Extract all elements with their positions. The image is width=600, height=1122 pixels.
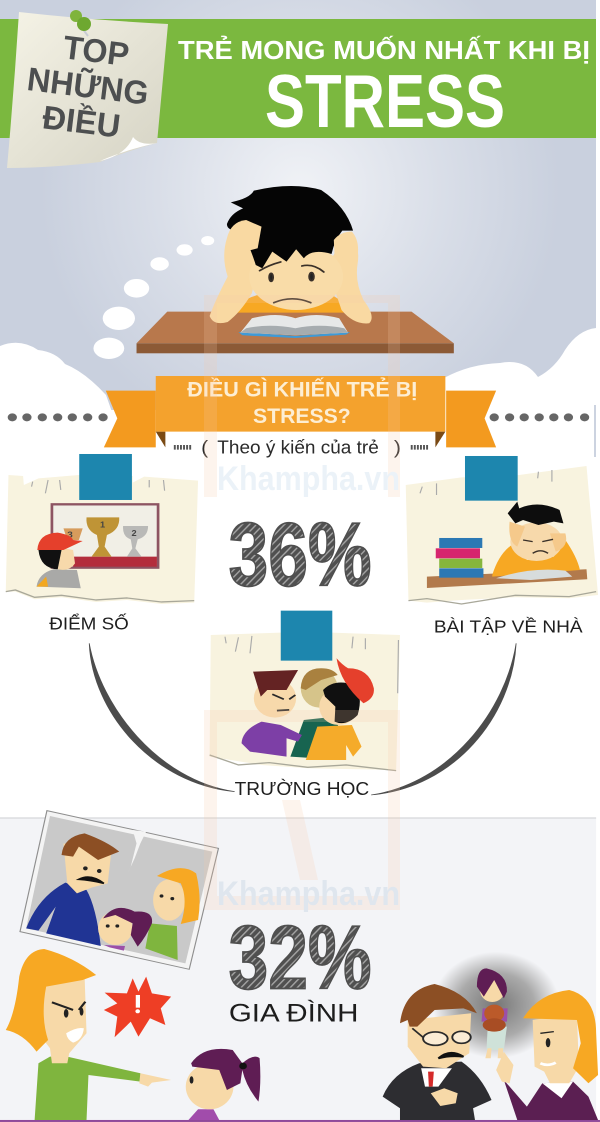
card: school	[210, 611, 400, 771]
tears	[225, 636, 398, 693]
hair	[227, 186, 353, 268]
trophy window	[52, 504, 158, 568]
hair	[6, 949, 96, 1052]
hair	[400, 984, 477, 1027]
label: grades: ĐIỂM SỐ	[49, 614, 129, 634]
angry mother	[6, 949, 171, 1120]
sticky note	[7, 10, 168, 168]
stressed boy at desk	[93, 186, 454, 359]
hands	[431, 1088, 458, 1106]
torn family photo	[20, 811, 218, 969]
card: homework	[406, 456, 598, 604]
card: grades	[6, 454, 198, 604]
tape	[465, 456, 518, 501]
note heading: ĐIỀU	[41, 98, 122, 145]
tape	[79, 454, 132, 500]
torn edge	[210, 755, 396, 771]
ribbon heading: ĐIỀU GÌ KHIẾN TRẺ BỊ	[187, 377, 417, 401]
pin	[70, 10, 91, 36]
mother	[145, 868, 200, 960]
head	[249, 243, 343, 310]
daughter	[98, 908, 152, 951]
watermark text bottom: Khampha.vn	[217, 875, 400, 913]
note curl	[100, 137, 157, 161]
caption: )	[394, 438, 401, 458]
watermark	[204, 295, 400, 913]
paper	[406, 466, 598, 603]
suit	[383, 1062, 492, 1120]
hair	[523, 990, 598, 1083]
head	[408, 1013, 471, 1068]
scolded girl	[186, 1049, 260, 1120]
body	[504, 1080, 598, 1120]
ribbon main	[156, 376, 445, 432]
right boy	[306, 658, 374, 760]
caption: (	[201, 438, 209, 458]
arms	[210, 230, 372, 323]
note heading: TOP	[61, 28, 131, 73]
ribbon heading	[187, 377, 417, 428]
header band	[0, 19, 596, 143]
label: family: GIA ĐÌNH	[229, 998, 358, 1027]
face	[260, 262, 324, 303]
raised hand	[496, 1052, 513, 1083]
section background	[0, 817, 600, 1122]
note heading: NHỮNG	[25, 60, 151, 112]
body and arm	[35, 1057, 140, 1120]
caption: Theo ý kiến của trẻ	[217, 438, 379, 458]
causes group	[6, 454, 598, 800]
white caption backing	[165, 431, 437, 461]
desk	[137, 312, 454, 353]
green banner	[0, 19, 596, 138]
sleeping boy	[492, 502, 580, 580]
title line: TRẺ MONG MUỐN NHẤT KHI BỊ	[178, 35, 590, 65]
torn edge	[6, 590, 194, 602]
shadow behind child	[433, 952, 560, 1058]
books	[436, 538, 483, 578]
moustache	[438, 1053, 463, 1058]
label: homework: BÀI TẬP VỀ NHÀ	[434, 617, 583, 637]
dotted dividers	[8, 413, 589, 421]
face	[546, 1038, 550, 1047]
torn edge	[408, 592, 596, 604]
right cloud	[440, 328, 596, 412]
shirt	[234, 293, 349, 313]
face	[52, 1002, 85, 1010]
arc: left	[89, 643, 235, 792]
section heading ribbon	[8, 376, 589, 461]
crack	[122, 830, 146, 885]
child with teddy bear	[477, 968, 508, 1058]
boy with cap	[37, 533, 83, 588]
paper	[6, 475, 198, 604]
head	[38, 977, 87, 1063]
36 percent: 36%	[228, 504, 372, 605]
middle boy	[290, 668, 338, 758]
thought bubbles	[93, 236, 214, 359]
32 percent: 32%	[228, 907, 372, 1008]
ribbon heading: STRESS?	[253, 404, 351, 428]
tears	[420, 470, 552, 495]
note paper	[7, 12, 168, 168]
label: school: TRƯỜNG HỌC	[235, 778, 369, 800]
frame	[20, 811, 218, 969]
icon: exclamation burst	[104, 977, 171, 1037]
trophy 1: 1	[100, 520, 105, 529]
fingers	[227, 220, 358, 260]
head	[533, 1013, 579, 1083]
trophy 3: 3	[67, 530, 73, 539]
sky background	[0, 0, 596, 410]
tears	[32, 480, 165, 493]
watermark text top: Khampha.vn	[217, 460, 400, 498]
ribbon folds	[156, 432, 165, 447]
hand	[139, 1073, 171, 1087]
clouds	[0, 328, 596, 412]
edge line	[594, 405, 596, 457]
trophy 2: 2	[132, 529, 137, 538]
father with glasses	[383, 984, 492, 1120]
tape	[281, 611, 332, 661]
note heading	[21, 24, 155, 147]
desk	[427, 569, 587, 588]
father	[26, 833, 119, 946]
title word stress: STRESS	[265, 59, 505, 143]
book	[238, 315, 350, 338]
family section	[0, 811, 600, 1122]
left cloud	[0, 343, 112, 412]
watermark logo	[204, 295, 400, 910]
paper	[210, 633, 400, 770]
arc: right	[371, 643, 516, 795]
ribbon tails	[104, 391, 156, 447]
glasses	[412, 1028, 471, 1045]
left boy	[242, 670, 302, 757]
mother in right corner	[496, 990, 598, 1120]
